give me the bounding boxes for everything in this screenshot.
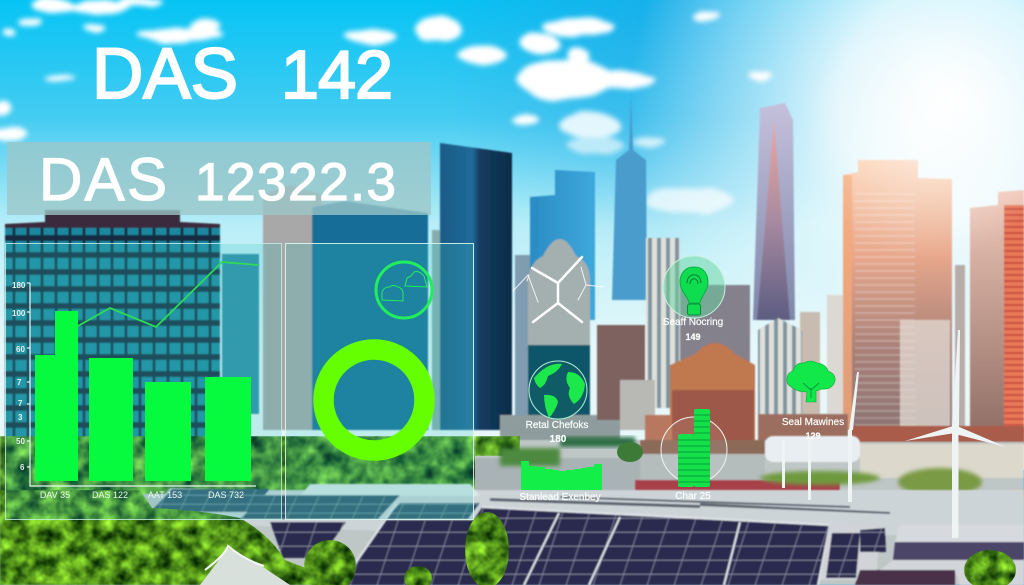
stat: bulb label: Seaff Nocring bbox=[663, 317, 723, 328]
foreground trees bbox=[0, 490, 1016, 585]
orange tower bbox=[843, 160, 952, 430]
ground and parking bbox=[0, 426, 1024, 585]
brown building bbox=[597, 325, 645, 420]
stat: tree label bbox=[782, 417, 844, 441]
white tower bbox=[758, 318, 802, 420]
tree band bbox=[0, 436, 982, 496]
mini bar chart bbox=[521, 461, 602, 490]
pink tower bbox=[970, 190, 1024, 445]
mini chart label: Stanlead Exenbey bbox=[519, 492, 601, 503]
y axis labels: 100 bbox=[12, 309, 26, 318]
sun haze over towers bbox=[780, 0, 1024, 280]
chart axes bbox=[27, 283, 256, 486]
icon: tree bbox=[787, 361, 835, 402]
clouds bbox=[0, 0, 773, 213]
panel: donut backdrop bbox=[286, 244, 474, 520]
striped tower bbox=[646, 238, 680, 408]
y axis labels bbox=[12, 281, 26, 472]
central glass tower bbox=[312, 201, 428, 430]
foreground wind turbines bbox=[782, 330, 1006, 538]
teal building bbox=[222, 254, 259, 414]
stat: globe label bbox=[526, 420, 588, 445]
large dark building bbox=[5, 210, 220, 444]
distant buildings bbox=[515, 255, 965, 435]
bar chart bbox=[12, 262, 258, 500]
brick building bbox=[645, 343, 755, 450]
x axis labels: AAT 153 bbox=[148, 490, 182, 500]
y axis labels: 7 bbox=[17, 378, 22, 387]
city skyline bbox=[5, 95, 1024, 450]
icon: white wind turbine bbox=[513, 257, 604, 322]
subtitle banner: DAS bbox=[39, 146, 167, 213]
panel: chart backdrop bbox=[6, 244, 282, 520]
trend line bbox=[78, 262, 258, 327]
coin stacks label: Char 25 bbox=[675, 491, 711, 502]
x axis labels bbox=[40, 490, 244, 500]
domed building bbox=[528, 239, 590, 420]
title: DAS bbox=[92, 35, 238, 114]
solar panel field bbox=[150, 484, 1024, 585]
stat: bulb label bbox=[663, 317, 723, 342]
stat: tree label: 129 bbox=[805, 431, 821, 441]
bars bbox=[35, 311, 251, 481]
y axis labels: 3 bbox=[18, 413, 23, 422]
tall purple tower bbox=[753, 103, 795, 320]
icon: people badge bbox=[376, 262, 432, 318]
y axis labels: 180 bbox=[12, 281, 26, 290]
light tower bbox=[432, 230, 472, 430]
donut chart bbox=[324, 350, 424, 450]
x axis labels: DAS 732 bbox=[208, 490, 244, 500]
icon: globe bbox=[529, 361, 587, 419]
y axis labels: 50 bbox=[16, 437, 25, 446]
y axis labels: 60 bbox=[16, 345, 25, 354]
blue towers bbox=[530, 170, 595, 320]
icon: light bulb bbox=[663, 256, 725, 318]
icon: coin stacks bbox=[661, 409, 727, 487]
stat: globe label: Retal Chefoks bbox=[526, 420, 588, 431]
subtitle banner bbox=[7, 142, 431, 215]
y axis labels: 6 bbox=[20, 463, 25, 472]
navy tower bbox=[440, 143, 512, 430]
low brick row bbox=[758, 414, 848, 442]
spire tower bbox=[612, 95, 647, 300]
title: 142 bbox=[281, 37, 393, 113]
x axis labels: DAS 122 bbox=[92, 490, 128, 500]
stat: tree label: Seal Mawines bbox=[782, 417, 844, 428]
stat: globe label: 180 bbox=[550, 434, 567, 445]
x axis labels: DAV 35 bbox=[40, 490, 70, 500]
tan building bbox=[263, 185, 322, 430]
subtitle banner: 12322.3 bbox=[195, 153, 396, 212]
stat: bulb label: 149 bbox=[685, 332, 701, 342]
y axis labels: 7 bbox=[18, 399, 23, 408]
title bbox=[92, 35, 393, 114]
panel frames bbox=[347, 503, 830, 585]
